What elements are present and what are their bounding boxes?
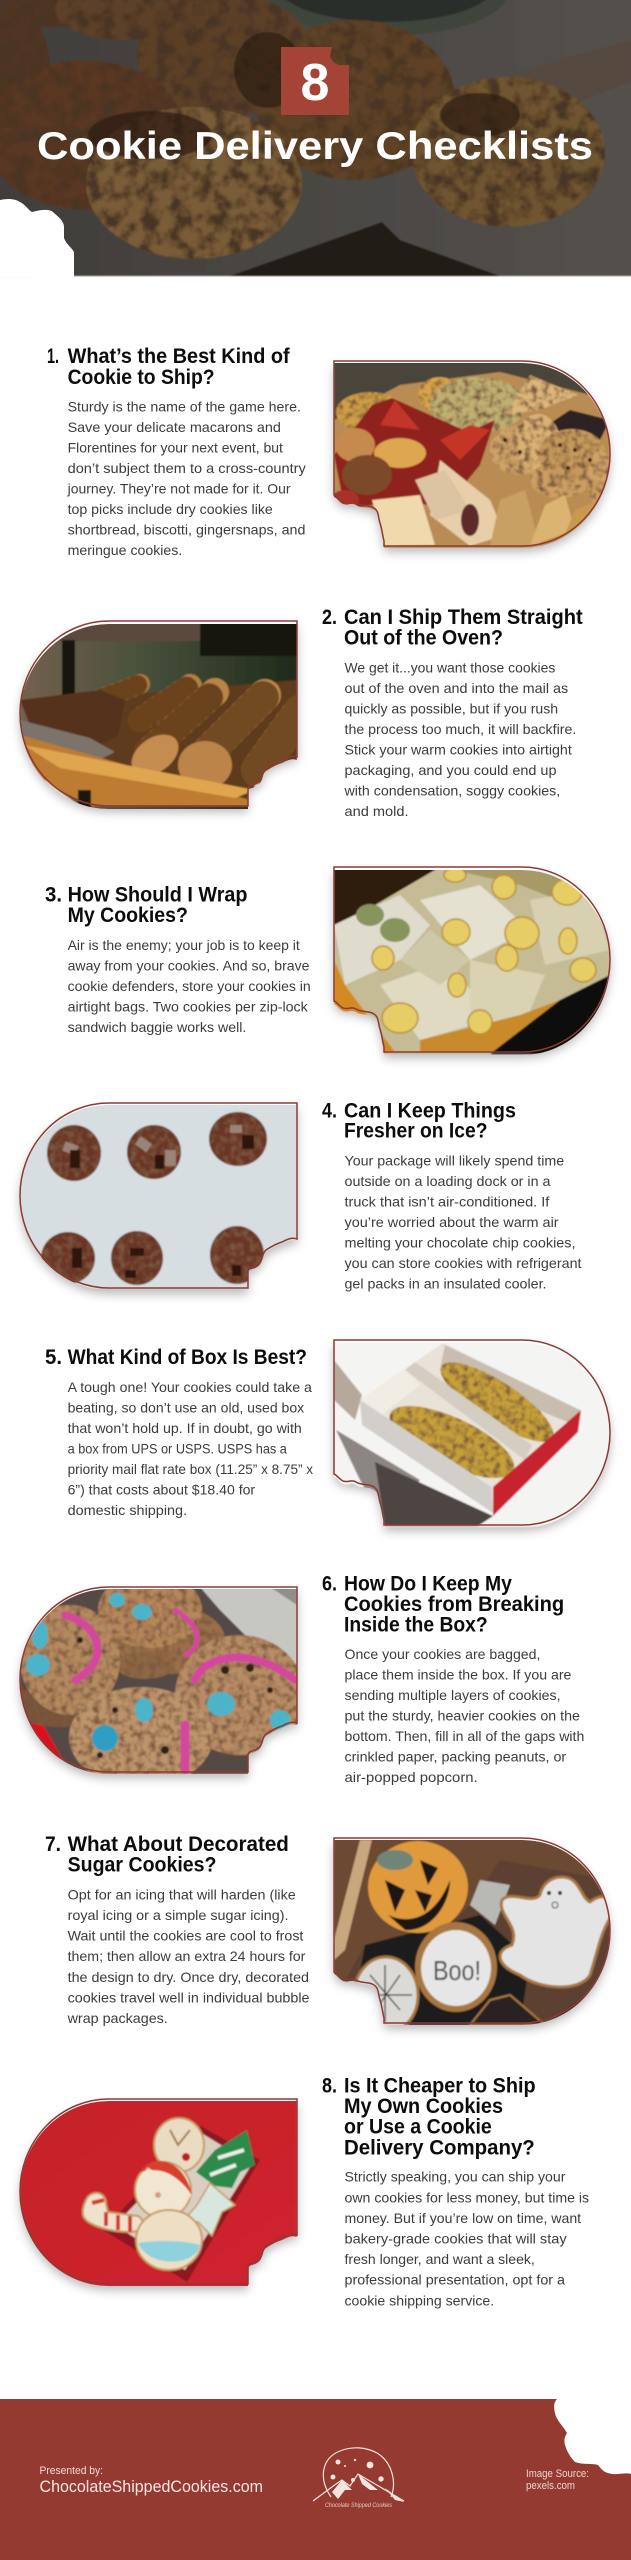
photo: cookies in clear bags	[334, 867, 610, 1054]
body text 6	[344, 1646, 584, 1785]
body text 3: sandwich baggie works well.	[68, 1019, 246, 1035]
heading 6: Cookies from Breaking	[344, 1593, 564, 1616]
footer background with bite	[0, 2399, 631, 2560]
body text 2: with condensation, soggy cookies,	[343, 782, 560, 798]
photo: cookies in a box	[334, 1340, 610, 1527]
body text 3: Air is the enemy; your job is to keep it	[68, 937, 300, 953]
body text 2: the process too much, it will backfire.	[344, 721, 576, 737]
panel: item 1	[47, 345, 612, 558]
panel: item 4	[20, 1099, 582, 1292]
body text 2: and mold.	[344, 803, 408, 819]
panel: item 3	[45, 867, 610, 1054]
body text 2: packaging, and you could end up	[344, 762, 557, 778]
body text 7	[67, 1886, 310, 2026]
body text 2: We get it...you want those cookies	[344, 659, 555, 675]
body text 7: Opt for an icing that will harden (like	[68, 1886, 296, 1902]
heading 8: or Use a Cookie	[344, 2116, 492, 2139]
body text 2: out of the oven and into the mail as	[344, 680, 568, 696]
body text 3: airtight bags. Two cookies per zip-lock	[68, 998, 309, 1014]
heading 3: My Cookies?	[68, 904, 188, 927]
photo: cookies on tray	[20, 621, 300, 811]
heading 7: What About Decorated	[68, 1833, 289, 1856]
heading 8: My Own Cookies	[344, 2095, 503, 2118]
heading 3: 3.	[45, 883, 62, 906]
body text 4: Your package will likely spend time	[344, 1153, 564, 1169]
body text 5: a box from UPS or USPS. USPS has a	[68, 1440, 287, 1456]
body text 4: melting your chocolate chip cookies,	[344, 1235, 576, 1251]
christmas tree cookie	[196, 2130, 255, 2188]
header banner	[0, 0, 631, 277]
body text 8: bakery-grade cookies that will stay	[344, 2230, 567, 2246]
body text 1: journey. They’re not made for it. Our	[67, 481, 291, 497]
body text 1: don’t subject them to a cross-country	[68, 460, 306, 476]
body text 8: Strictly speaking, you can ship your	[344, 2169, 566, 2185]
body text 5: priority mail flat rate box (11.25” x 8.75” x	[68, 1461, 313, 1477]
heading 2: 2.	[322, 606, 337, 629]
body text 8: cookie shipping service.	[344, 2292, 494, 2308]
body text 8: fresh longer, and want a sleek,	[344, 2251, 535, 2267]
body text 5: beating, so don’t use an old, used box	[68, 1400, 304, 1416]
body text 4: you can store cookies with refrigerant	[344, 1255, 582, 1271]
body text 7: Wait until the cookies are cool to frost	[68, 1928, 303, 1944]
photo: decorated smiley cookies	[12, 1572, 305, 1787]
heading 4: 4.	[322, 1099, 337, 1122]
presented by: Presented by:	[40, 2465, 103, 2477]
body text 4	[344, 1153, 582, 1292]
heading 4: Fresher on Ice?	[344, 1120, 488, 1143]
body text 3	[68, 937, 311, 1035]
body text 8	[344, 2169, 589, 2308]
footer	[0, 2399, 631, 2560]
body text 2: Stick your warm cookies into airtight	[344, 741, 572, 757]
body text 1: Save your delicate macarons and	[68, 419, 281, 435]
heading 7: Sugar Cookies?	[68, 1854, 216, 1877]
body text 4: you’re worried about the warm air	[344, 1214, 559, 1230]
body text 2: quickly as possible, but if you rush	[344, 700, 558, 716]
body text 4: truck that isn’t air-conditioned. If	[344, 1194, 549, 1210]
heading 4	[322, 1099, 516, 1143]
image source: Image Source:	[526, 2468, 589, 2480]
body text 5: 6”) that costs about $18.40 for	[68, 1482, 255, 1498]
body text 1	[67, 399, 306, 558]
panel: item 2	[20, 606, 583, 819]
body text 6: air-popped popcorn.	[344, 1769, 478, 1785]
body text 3: cookie defenders, store your cookies in	[68, 978, 311, 994]
photo: christmas cookies on red	[20, 2099, 297, 2287]
body text 1: meringue cookies.	[68, 542, 182, 558]
body text 5: A tough one! Your cookies could take a	[68, 1379, 312, 1395]
body text 6: sending multiple layers of cookies,	[344, 1687, 561, 1703]
cookie rows	[85, 684, 300, 770]
heading 1: What’s the Best Kind of	[68, 345, 291, 368]
heading 6: 6.	[322, 1573, 337, 1596]
heading 6	[322, 1573, 564, 1636]
photo: halloween sugar cookies	[334, 1838, 612, 2033]
body text 6: crinkled paper, packing peanuts, or	[344, 1748, 567, 1764]
title: Cookie Delivery Checklists	[37, 125, 593, 168]
body text 2	[343, 659, 576, 819]
body text 4: outside on a loading dock or in a	[344, 1173, 551, 1189]
number badge: 8	[301, 54, 329, 112]
heading 2: Out of the Oven?	[344, 626, 503, 650]
heading 1	[47, 345, 291, 389]
photo: chocolate cookies on parchment	[20, 1103, 297, 1289]
heading 1: Cookie to Ship?	[68, 366, 215, 389]
heading 5: 5.	[45, 1346, 62, 1369]
heading 1: 1.	[47, 345, 59, 368]
heading 7: 7.	[45, 1833, 61, 1856]
body text 8: money. But if you’re low on time, want	[344, 2210, 581, 2226]
body text 1: shortbread, biscotti, gingersnaps, and	[68, 522, 305, 538]
heading 6: How Do I Keep My	[344, 1573, 512, 1596]
body text 6: bottom. Then, fill in all of the gaps with	[344, 1728, 584, 1744]
presented by: ChocolateShippedCookies.com	[40, 2477, 263, 2496]
body text 1: Florentines for your next event, but	[68, 440, 283, 456]
panel: item 7	[45, 1833, 612, 2033]
body text 4: gel packs in an insulated cooler.	[344, 1276, 546, 1292]
body text 7: the design to dry. Once dry, decorated	[68, 1969, 309, 1985]
panel: item 6	[12, 1572, 584, 1787]
bite mark: header	[0, 199, 74, 277]
body text 7: royal icing or a simple sugar icing).	[68, 1907, 288, 1923]
image source	[526, 2468, 589, 2492]
body text 5	[68, 1379, 313, 1518]
photo: assorted pastries	[331, 361, 612, 548]
body text 5: domestic shipping.	[68, 1502, 187, 1518]
heading 3: How Should I Wrap	[68, 883, 247, 906]
heading 5: What Kind of Box Is Best?	[68, 1346, 307, 1369]
body text 7: them; then allow an extra 24 hours for	[68, 1948, 306, 1964]
body text 1: top picks include dry cookies like	[68, 501, 273, 517]
body text 7: wrap packages.	[67, 2010, 168, 2026]
heading 4: Can I Keep Things	[344, 1099, 516, 1122]
presented by	[40, 2465, 263, 2496]
heading 2: Can I Ship Them Straight	[344, 606, 583, 629]
logo: cookie mountain	[313, 2448, 404, 2509]
heading 7	[45, 1833, 289, 1877]
heading 8: 8.	[322, 2074, 337, 2098]
body text 6: Once your cookies are bagged,	[344, 1646, 540, 1662]
body text 6: put the sturdy, heavier cookies on the	[344, 1708, 580, 1724]
body text 3: away from your cookies. And so, brave	[68, 958, 310, 974]
body text 7: cookies travel well in individual bubble	[68, 1989, 310, 2005]
photo: halloween sugar cookies: Boo!	[433, 1955, 481, 1986]
body text 8: own cookies for less money, but time is	[344, 2189, 589, 2205]
body text 1: Sturdy is the name of the game here.	[68, 399, 301, 415]
heading 6: Inside the Box?	[344, 1613, 488, 1636]
header photo: cookies	[0, 0, 631, 276]
number badge	[281, 47, 349, 115]
panel: item 8	[20, 2074, 589, 2308]
image source: pexels.com	[526, 2480, 575, 2492]
panel: item 5	[45, 1340, 610, 1527]
body text 6: place them inside the box. If you are	[344, 1666, 572, 1682]
heading 2	[322, 606, 583, 650]
logo: cookie mountain: Chocolate Shipped Cookies	[325, 2503, 392, 2509]
heading 8	[322, 2074, 536, 2159]
heading 3	[45, 883, 248, 927]
heading 8: Delivery Company?	[344, 2136, 535, 2159]
heading 8: Is It Cheaper to Ship	[344, 2074, 536, 2098]
body text 8: professional presentation, opt for a	[344, 2272, 565, 2288]
body text 5: that won’t hold up. If in doubt, go with	[68, 1420, 302, 1436]
